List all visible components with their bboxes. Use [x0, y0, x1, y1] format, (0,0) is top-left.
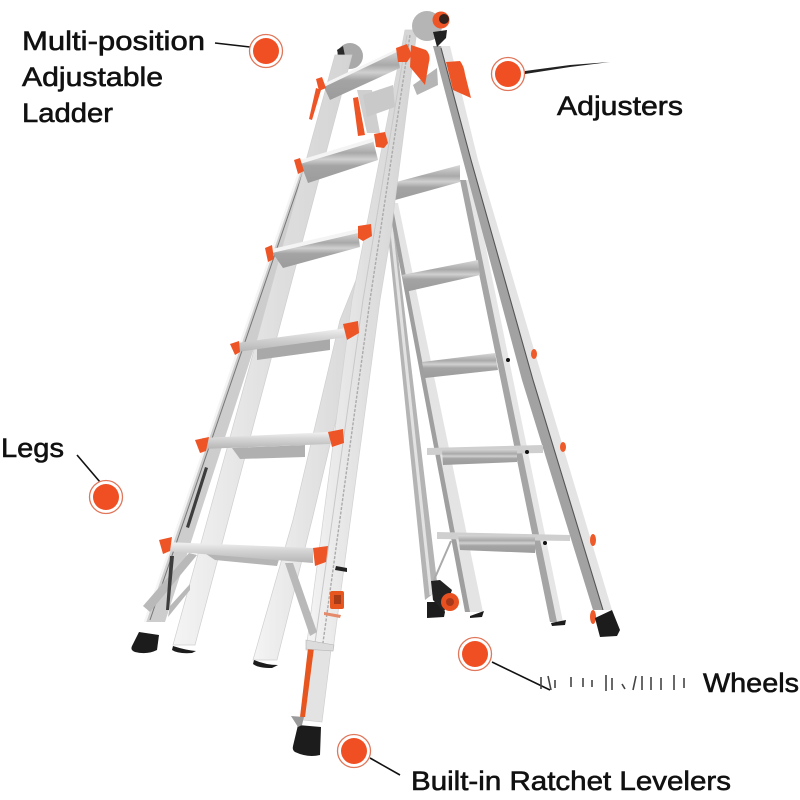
marker — [338, 734, 370, 768]
rung 1 — [323, 49, 400, 100]
heading text: Multi-position — [22, 26, 205, 56]
rung 6 — [165, 542, 313, 566]
right foot latch — [291, 716, 304, 727]
marker — [492, 58, 524, 90]
front ladder — [131, 11, 471, 756]
heading text: Ladder — [22, 98, 113, 128]
rung 5 — [202, 432, 330, 459]
marker — [458, 638, 492, 670]
label: Built-in Ratchet Levelers — [411, 766, 731, 796]
callout: Multi-position Adjustable Ladder — [22, 26, 282, 128]
top hinge right — [412, 11, 450, 47]
label: Legs — [1, 433, 64, 463]
left slide slot — [186, 467, 208, 528]
left slide bar — [166, 556, 174, 610]
back feet — [427, 602, 620, 637]
leader line — [215, 43, 250, 47]
back rail: outer right — [433, 46, 612, 610]
marker — [90, 480, 122, 514]
callout: Adjusters — [492, 58, 683, 121]
ratchet lever box — [324, 566, 347, 618]
rung 3 — [272, 229, 360, 268]
callout: Legs — [1, 433, 122, 514]
label: Adjusters — [557, 91, 683, 121]
back rail: inner right — [460, 180, 563, 622]
top plate behind top rung — [363, 68, 438, 117]
rung 4 — [237, 328, 347, 360]
smudged text artefact — [541, 675, 684, 691]
leader line — [492, 662, 550, 690]
back rail: left pair — [385, 203, 483, 612]
orange adjusters — [309, 45, 471, 136]
callout: Built-in Ratchet Levelers — [338, 734, 731, 796]
marker — [250, 34, 282, 68]
leader line — [77, 455, 100, 482]
leader line — [370, 758, 400, 775]
label: Wheels — [703, 668, 799, 698]
callout: Wheels — [458, 638, 799, 698]
rung 2 — [300, 138, 378, 183]
front feet — [131, 632, 321, 756]
rung rivets — [506, 358, 547, 545]
icon: wheel — [431, 541, 459, 612]
top hinge left — [337, 43, 363, 69]
rungs — [165, 49, 400, 566]
back rail orange clips — [531, 349, 596, 624]
rung end caps — [159, 44, 412, 566]
lower right leg with orange strip — [300, 640, 334, 722]
heading text — [22, 26, 205, 128]
front outer left rail — [145, 170, 312, 622]
bottom braces — [143, 553, 317, 636]
back rungs — [385, 165, 570, 553]
front rail pair — [173, 30, 417, 660]
back ladder — [385, 46, 620, 637]
heading text: Adjustable — [22, 62, 163, 92]
leader line — [525, 62, 610, 74]
